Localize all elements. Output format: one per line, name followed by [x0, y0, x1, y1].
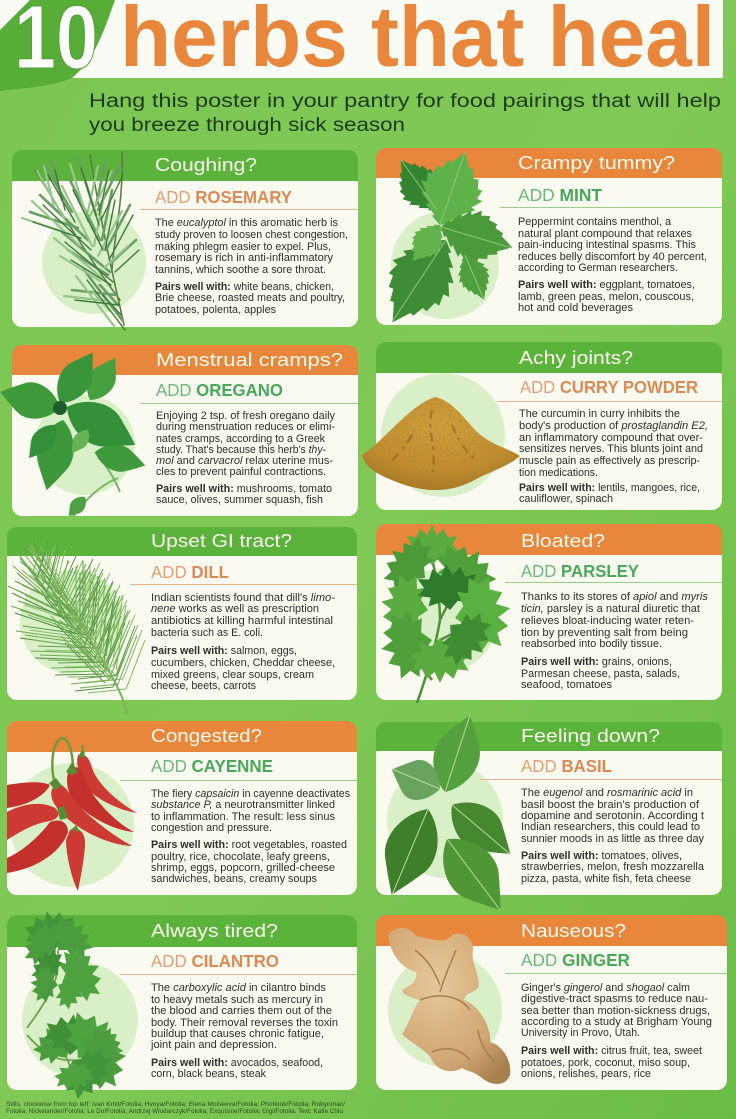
icon: corner leaf [0, 0, 115, 91]
herb name: ADD GINGER [521, 950, 630, 970]
body text: potatoes, pork, coconut, miso soup, [521, 1057, 690, 1069]
body text: to heavy metals such as mercury in [151, 994, 323, 1006]
body text [518, 216, 707, 314]
body text: pizza, pasta, white fish, feta cheese [521, 873, 691, 885]
question heading: Nauseous? [521, 920, 626, 941]
herb name: ADD DILL [151, 562, 229, 582]
body text: The carboxylic acid in cilantro binds [151, 982, 326, 994]
body text: cles to prevent painful contractions. [156, 466, 326, 478]
body text: sea better than motion-sickness drugs, [521, 1005, 710, 1017]
subtitle: you breeze through sick season [89, 115, 405, 136]
body text: Peppermint contains menthol, a [518, 216, 671, 228]
body text: basil boost the brain's production of [521, 799, 699, 811]
body text: hot and cold beverages [518, 302, 633, 314]
body text [151, 592, 335, 692]
body text: rosemary is rich in anti-inflammatory [155, 252, 334, 264]
body text: The curcumin in curry inhibits the [519, 408, 680, 420]
body text [521, 787, 705, 885]
body text: Pairs well with: mushrooms, tomato [156, 483, 332, 495]
question heading: Coughing? [155, 154, 257, 175]
body text: tion medications. [519, 467, 598, 479]
body text: cauliflower, spinach [519, 493, 613, 505]
herb name: ADD OREGANO [156, 380, 283, 400]
body text: sunnier moods in as little as three day [521, 833, 705, 845]
body text: The fiery capsaicin in cayenne deactivates [151, 788, 350, 800]
question heading: Congested? [151, 725, 262, 746]
photo credits: Fotolia; Nickeiander/Fotolia; Le Do/Fotolia; Andrzej Wlodarczyk/Fotolia; Exquisine/Fotolia; Gigi/Fotolia. Text: Katie Chiu [6, 1108, 343, 1115]
body text: reabsorbed into bodily tissue. [521, 638, 662, 650]
panel: bloated [374, 524, 722, 703]
body text: Parmesan cheese, pasta, salads, [521, 668, 680, 680]
body text: sauce, olives, summer squash, fish [156, 494, 323, 506]
body text: dopamine and serotonin. According t [521, 810, 704, 822]
herb name: ADD CURRY POWDER [520, 377, 698, 397]
body text [151, 788, 350, 885]
body text: shrimp, eggs, popcorn, grilled-cheese [151, 862, 335, 874]
icon: curry powder [362, 397, 520, 490]
body text [156, 410, 336, 506]
body text: Brie cheese, roasted meats and poultry, [155, 292, 345, 304]
body text: congestion and pressure. [151, 822, 272, 834]
body text: Ginger's gingerol and shogaol calm [521, 982, 690, 994]
body text: cucumbers, chicken, Cheddar cheese, [151, 657, 335, 669]
subtitle: Hang this poster in your pantry for food pairings that will help [89, 91, 721, 112]
icon: rosemary [22, 152, 139, 330]
body text: Pairs well with: root vegetables, roasted [151, 839, 347, 851]
body text: Indian scientists found that dill's limo- [151, 592, 335, 604]
body text: nene works as well as prescription [151, 603, 319, 615]
body text: according to a study at Brigham Young [521, 1016, 712, 1028]
body text: during menstruation reduces or elimi- [156, 421, 335, 433]
body text: Pairs well with: grains, onions, [521, 656, 672, 668]
title banner [0, 0, 723, 91]
body text: Pairs well with: tomatoes, olives, [521, 850, 682, 862]
icon: cilantro [16, 906, 133, 1107]
body text: according to German researchers. [518, 262, 678, 274]
body text: Pairs well with: eggplant, tomatoes, [518, 279, 695, 291]
body text: buildup that causes chronic fatigue, [151, 1028, 324, 1040]
body text: Indian researchers, this could lead to [521, 821, 700, 833]
icon: basil [369, 708, 524, 925]
body text: making phlegm easier to expel. Plus, [155, 241, 331, 253]
question heading: Feeling down? [521, 725, 660, 746]
panel: congested [7, 721, 357, 895]
body text: muscle pain as effectively as prescrip- [519, 455, 700, 467]
body text: digestive-tract spasms to reduce nau- [521, 993, 708, 1005]
body text: The eugenol and rosmarinic acid in [521, 787, 693, 799]
question heading: Crampy tummy? [518, 152, 675, 173]
body text: substance P, a neurotransmitter linked [151, 799, 335, 811]
body text: antibiotics at killing harmful intestinal [151, 615, 333, 627]
question heading: Bloated? [521, 530, 605, 551]
body text: body. Their removal reverses the toxin [151, 1017, 338, 1029]
body text: Pairs well with: white beans, chicken, [155, 281, 334, 293]
body text: tion by preventing salt from being [521, 627, 688, 639]
body text [521, 982, 712, 1080]
icon: oregano [0, 344, 149, 521]
herb name: ADD CAYENNE [151, 756, 273, 776]
photo credits: Stills, clockwise from top left: Ivan Kmit/Fotolia; Hvoya/Fotolia; Elena Moiseeva/Fotolia; Photlook/Fotolia; Robynmac/ [6, 1101, 345, 1108]
icon: dill [8, 541, 145, 715]
panel: feeling down [369, 708, 722, 925]
body text: sensitizes nerves. This blunts joint and [519, 443, 703, 455]
body text [521, 591, 709, 691]
body text: ticin, parsley is a natural diuretic that [521, 603, 700, 615]
body text: cheese, beets, carrots [151, 680, 256, 692]
body text: natural plant compound that relaxes [518, 228, 692, 240]
panel: coughing [12, 150, 358, 330]
body text: pain-inducing intestinal spasms. This [518, 239, 696, 251]
herb name: ADD BASIL [521, 756, 612, 776]
panel: crampy tummy [364, 142, 722, 341]
body text: Pairs well with: citrus fruit, tea, sweet [521, 1045, 702, 1057]
question heading: Achy joints? [519, 347, 633, 368]
icon: ginger [388, 928, 510, 1084]
body text [150, 982, 338, 1080]
body text: Enjoying 2 tsp. of fresh oregano daily [156, 410, 336, 422]
question heading: Upset GI tract? [151, 530, 292, 551]
herb name: ADD PARSLEY [521, 561, 639, 581]
subtitle [89, 91, 721, 136]
body text: relieves bloat-inducing water reten- [521, 615, 694, 627]
body text: to inflammation. The result: less sinus [151, 811, 335, 823]
icon: mint [364, 142, 520, 341]
panel: menstrual cramps [0, 344, 358, 521]
body text: an inflammatory compound that over- [519, 432, 703, 444]
body text: the blood and carries them out of the [151, 1005, 332, 1017]
icon: cayenne [7, 738, 137, 891]
body text: joint pain and depression. [150, 1039, 277, 1051]
icon: parsley [374, 525, 517, 703]
herb name: ADD CILANTRO [151, 951, 279, 971]
body text: strawberries, melon, fresh mozzarella [521, 861, 704, 873]
question heading: Menstrual cramps? [156, 349, 343, 370]
herb name: ADD ROSEMARY [155, 187, 292, 207]
body text: poultry, rice, chocolate, leafy greens, [151, 851, 330, 863]
herb name: ADD MINT [518, 185, 602, 205]
body text: bacteria such as E. coli. [151, 627, 263, 639]
body text: Pairs well with: avocados, seafood, [151, 1057, 323, 1069]
body text: potatoes, polenta, apples [155, 304, 276, 316]
panel: nauseous [376, 915, 727, 1090]
body text: mixed greens, clear soups, cream [151, 669, 314, 681]
body text: tannins, which soothe a sore throat. [155, 264, 326, 276]
body text: mol and carvacrol relax uterine mus- [156, 455, 333, 467]
body text [519, 408, 708, 505]
body text: study proven to loosen chest congestion, [155, 229, 348, 241]
body text: seafood, tomatoes [521, 679, 612, 691]
body text: corn, black beans, steak [151, 1068, 267, 1080]
panel: always tired [7, 906, 357, 1107]
body text: onions, relishes, pears, rice [521, 1068, 651, 1080]
body text: reduces belly discomfort by 40 percent, [518, 251, 707, 263]
body text: lamb, green peas, melon, couscous, [518, 291, 694, 303]
body text: sandwiches, beans, creamy soups [151, 873, 317, 885]
body text: The eucalyptol in this aromatic herb is [155, 217, 338, 229]
panel: achy joints [362, 342, 722, 510]
question heading: Always tired? [151, 920, 278, 941]
body text: nates cramps, according to a Greek [156, 433, 326, 445]
panel: upset GI tract [7, 527, 357, 715]
body text: study. That's because this herb's thy- [156, 444, 326, 456]
body text [155, 217, 348, 316]
body text: Pairs well with: lentils, mangoes, rice, [519, 482, 700, 494]
body text: University in Provo, Utah. [521, 1027, 640, 1039]
photo credits [6, 1101, 345, 1115]
body text: Pairs well with: salmon, eggs, [151, 645, 297, 657]
body text: Thanks to its stores of apiol and myris [521, 591, 709, 603]
body text: body's production of prostaglandin E2, [519, 420, 708, 432]
